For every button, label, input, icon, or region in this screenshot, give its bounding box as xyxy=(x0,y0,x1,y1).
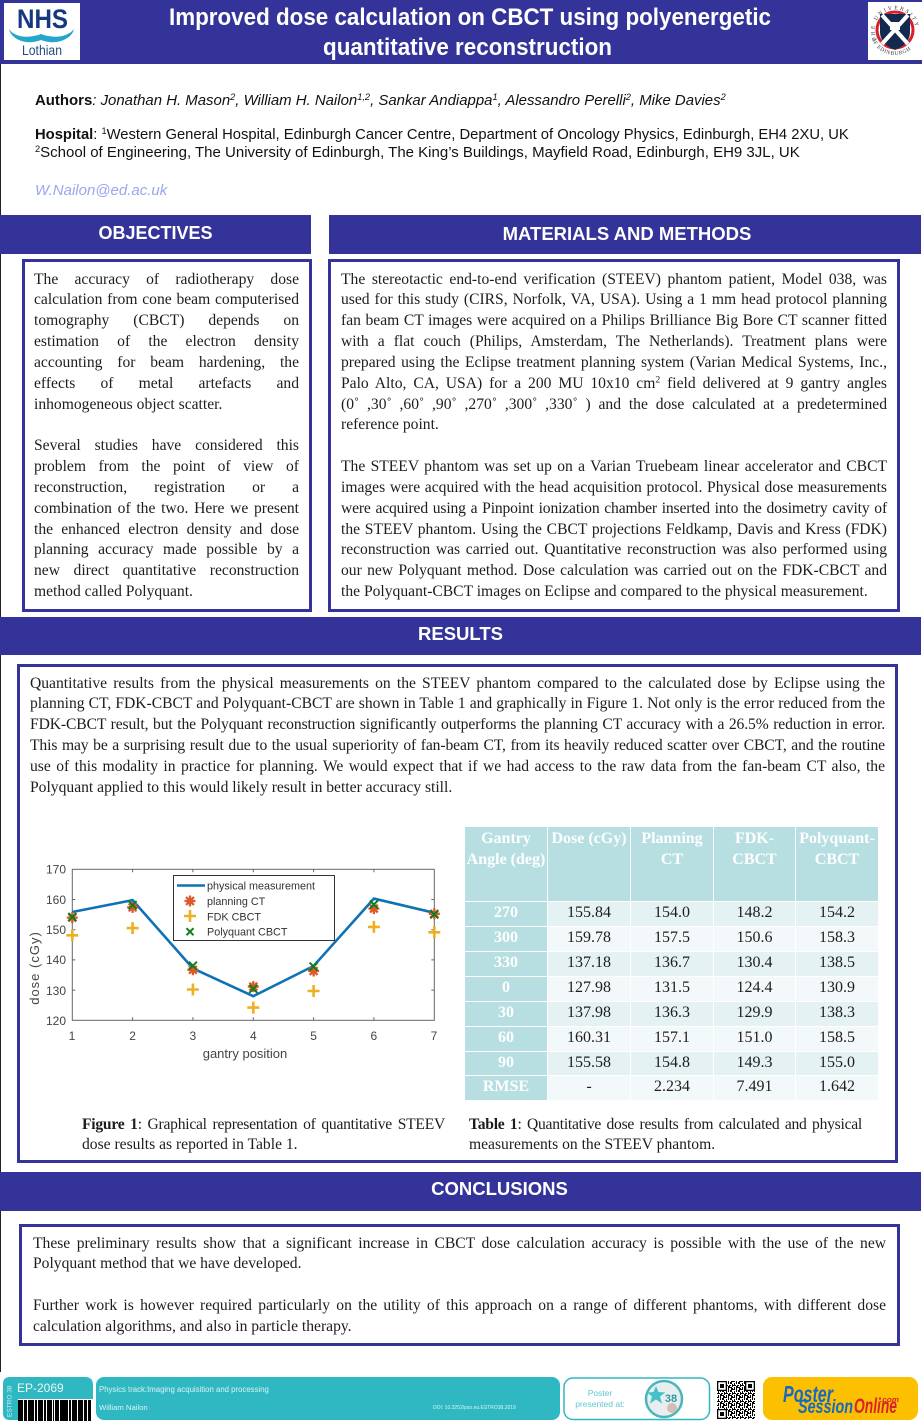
methods text: prepared using the Eclipse treatment planning system (Varian Medical Systems, Inc., xyxy=(341,354,887,371)
table: quantitative dose results: 130.4 xyxy=(736,954,772,971)
title text xyxy=(169,4,771,61)
table: quantitative dose results: 138.3 xyxy=(819,1004,855,1021)
table: quantitative dose results: 300 xyxy=(494,929,518,946)
contact email: W.Nailon@ed.ac.uk xyxy=(35,182,167,199)
table: quantitative dose results: 130.9 xyxy=(819,979,855,996)
methods text: were acquired using a Pinpoint ionization chamber inserted into the dosimetry cavity of xyxy=(341,500,887,517)
table: quantitative dose results: 137.18 xyxy=(567,954,611,971)
x axis labels: 4 xyxy=(250,1029,257,1043)
panel: objectives xyxy=(22,259,312,612)
icon: barcode xyxy=(18,1400,91,1421)
heading: conclusions xyxy=(0,1172,921,1211)
x axis labels: 5 xyxy=(310,1029,317,1043)
methods text: Palo Alto, CA, USA) for a 200 MU 10x10 cm2 field delivered at 9 gantry angles xyxy=(341,374,887,392)
table 1 caption: Table 1: Quantitative dose results from calculated and physical xyxy=(469,1116,862,1132)
panel: materials and methods xyxy=(328,259,900,612)
y axis labels: 150 xyxy=(46,923,66,937)
footer: poster id tag: ESTRO 38 xyxy=(6,1385,14,1417)
methods text: (0˚ ,30˚ ,60˚ ,90˚ ,270˚ ,300˚ ,330˚ ) and the dose calculated at a predetermined xyxy=(341,396,887,413)
conclusions text xyxy=(33,1234,886,1335)
results text: use of this modality in practice for planning. We would expect that if we had access to the raw data from the fan-beam CT also, the xyxy=(30,758,885,775)
methods text: reconstruction was carried out. Quantitative reconstruction was also performed using xyxy=(341,541,887,558)
results text: This may be a surprising result due to the usual superiority of fan-beam CT, from its heavily reduced scatter over CBCT, and the routine xyxy=(30,737,885,754)
results text: Polyquant applied to this would likely result in better accuracy still. xyxy=(30,779,452,796)
x axis labels: 2 xyxy=(129,1029,136,1043)
heading: results xyxy=(0,617,921,655)
y axis labels: 170 xyxy=(46,862,66,876)
objectives text: accounting for beam hardening, the xyxy=(34,354,299,371)
figure 1 caption: Figure 1: Graphical representation of quantitative STEEV xyxy=(82,1116,445,1132)
objectives text: reconstruction, registration or a xyxy=(34,479,299,496)
table: quantitative dose results: 136.7 xyxy=(654,954,690,971)
objectives text: calculation from cone beam computerised xyxy=(34,291,299,308)
objectives text: the enhanced electron density and dose xyxy=(34,521,299,538)
table: quantitative dose results xyxy=(465,827,878,1100)
series: Polyquant CBCT xyxy=(68,900,438,993)
authors: Authors: Jonathan H. Mason2, William H. Nailon1,2, Sankar Andiappa1, Alessandro Perelli2, Mike Davies2 xyxy=(35,92,726,109)
footer: poster presented at: presented at: xyxy=(575,1399,625,1409)
chart legend: FDK CBCT xyxy=(207,911,261,923)
objectives text: planning accuracy made possible by a xyxy=(34,541,299,558)
table: quantitative dose results: 157.1 xyxy=(654,1029,690,1046)
hospital affiliations xyxy=(35,126,849,161)
methods text: fan beam CT images were acquired on a Philips Brilliance Big Bore CT scanner fitted xyxy=(341,312,887,329)
table: quantitative dose results: 154.0 xyxy=(654,904,690,921)
heading: results: RESULTS xyxy=(418,623,503,644)
table: quantitative dose results: Polyquant-CBCT xyxy=(799,830,875,868)
table: quantitative dose results: 138.5 xyxy=(819,954,855,971)
presenter name: William Nailon xyxy=(99,1403,148,1412)
footer: poster id tag xyxy=(3,1377,93,1421)
footer: poster id tag: EP-2069 xyxy=(17,1381,64,1395)
results text xyxy=(30,674,885,796)
x axis labels: 6 xyxy=(371,1029,378,1043)
logo: NHS Lothian: Lothian xyxy=(22,42,62,58)
methods text: images were acquired with the head acquisition protocol. Physical dose measurements xyxy=(341,479,887,496)
logo: Poster Session Online: .com xyxy=(880,1395,899,1404)
x axis labels: 7 xyxy=(431,1029,438,1043)
y axis title: dose (cGy) xyxy=(27,931,42,1005)
results text: FDK-CBCT result, but the Polyquant reconstruction significantly outperforms the planning CT accuracy with a 26.5% reduction in error. xyxy=(30,716,885,733)
objectives text: estimation of the electron density xyxy=(34,333,299,350)
objectives text: inhomogeneous object scatter. xyxy=(34,396,222,413)
table: quantitative dose results: 148.2 xyxy=(736,904,772,921)
table: quantitative dose results: - xyxy=(586,1078,592,1095)
conclusions text: calculation algorithms, and also in particle therapy. xyxy=(33,1318,352,1335)
objectives text: Several studies have considered this xyxy=(34,437,299,454)
chart legend: physical measurement xyxy=(207,881,315,893)
objectives text: problem from the point of view of xyxy=(34,458,299,475)
icon: ESTRO 38 badge: 38 xyxy=(665,1393,677,1405)
methods text: used for this study (CIRS, Norfolk, VA, USA). Using a 1 mm head protocol planning xyxy=(341,291,887,308)
x axis title: gantry position xyxy=(203,1046,287,1061)
table: quantitative dose results: 330 xyxy=(494,954,518,971)
title text: quantitative reconstruction xyxy=(323,34,612,61)
series: FDK CBCT xyxy=(66,921,440,1014)
objectives text xyxy=(34,270,299,600)
table: quantitative dose results: 60 xyxy=(498,1029,514,1046)
logo: Poster Session Online: Poster xyxy=(783,1381,834,1407)
series: planning CT xyxy=(67,902,440,992)
logo: NHS Lothian xyxy=(4,3,80,60)
table: quantitative dose results: 90 xyxy=(498,1054,514,1070)
table: quantitative dose results: 157.5 xyxy=(654,929,690,946)
heading: objectives: OBJECTIVES xyxy=(98,223,213,243)
table: quantitative dose results: 0 xyxy=(502,979,510,996)
objectives text: The accuracy of radiotherapy dose xyxy=(34,270,299,288)
hospital affiliations: 2School of Engineering, The University of Edinburgh, The King’s Buildings, Mayfield Road, Edinburgh, EH9 3JL, UK xyxy=(35,144,800,161)
logo: Poster Session Online xyxy=(763,1377,918,1420)
table: quantitative dose results: 1.642 xyxy=(819,1078,855,1095)
heading: materials and methods: MATERIALS AND METHODS xyxy=(503,223,751,244)
x axis labels: 3 xyxy=(190,1029,197,1043)
footer: poster presented at xyxy=(563,1377,710,1420)
objectives text: new direct quantitative reconstruction xyxy=(34,562,299,579)
y axis labels: 120 xyxy=(46,1014,66,1028)
conclusions text: These preliminary results show that a significant increase in CBCT dose calculation accuracy is possible with the use of the new xyxy=(33,1234,886,1252)
table: quantitative dose results: 159.78 xyxy=(567,929,611,946)
y axis labels xyxy=(46,862,66,1028)
objectives text: tomography (CBCT) depends on xyxy=(34,312,299,329)
table: quantitative dose results: Dose (cGy) xyxy=(551,830,627,847)
logo: University of Edinburgh crest: THE UNIVERSITY xyxy=(870,6,919,42)
series: physical measurement xyxy=(72,899,434,996)
heading: objectives xyxy=(0,215,311,254)
line chart: dose by gantry position xyxy=(27,862,440,1061)
logo: Poster Session Online: Online xyxy=(854,1395,897,1418)
table 1 caption xyxy=(469,1116,862,1153)
table: quantitative dose results: 2.234 xyxy=(654,1078,690,1095)
table: quantitative dose results: 150.6 xyxy=(736,929,772,946)
table: quantitative dose results: RMSE xyxy=(483,1078,529,1095)
chart legend xyxy=(174,876,334,940)
table: quantitative dose results: Gantry Angle (deg) xyxy=(467,830,545,868)
conclusions text: Further work is however required particularly on the utility of this approach on a range of different phantoms, with different dose xyxy=(33,1297,886,1314)
figure 1 caption xyxy=(82,1116,446,1153)
logo: University of Edinburgh crest: OF EDINBURGH xyxy=(872,38,911,55)
table: quantitative dose results: 155.84 xyxy=(567,904,611,921)
methods text: the STEEV phantom. Using the CBCT projections Feldkamp, Davis and Kress (FDK) xyxy=(341,521,887,538)
methods text: with a flat couch (Philips, Amsterdam, The Netherlands). Treatment plans were xyxy=(341,333,887,350)
title text: Improved dose calculation on CBCT using polyenergetic xyxy=(169,4,771,31)
table: quantitative dose results: 160.31 xyxy=(567,1029,611,1046)
track name: Physics track:Imaging acquisition and processing xyxy=(99,1384,269,1394)
table: quantitative dose results: 154.8 xyxy=(654,1054,690,1070)
table: quantitative dose results: 154.2 xyxy=(819,904,855,921)
panel: conclusions xyxy=(19,1224,900,1346)
doi: DOI: 10.3252/pso.eu.ESTRO38.2019 xyxy=(433,1405,516,1411)
table: quantitative dose results: 270 xyxy=(494,904,518,921)
table: quantitative dose results: CBCT xyxy=(732,850,777,868)
methods text: the Polyquant-CBCT images on Eclipse and compared to the physical measurement. xyxy=(341,583,868,600)
table: quantitative dose results: 149.3 xyxy=(736,1054,772,1070)
conclusions text: Polyquant method that we have developed. xyxy=(33,1255,302,1272)
objectives text: effects of metal artefacts and xyxy=(34,375,299,392)
table: quantitative dose results: 137.98 xyxy=(567,1004,611,1021)
footer: poster presented at: Poster xyxy=(588,1388,612,1398)
hospital affiliations: Hospital: 1Western General Hospital, Edinburgh Cancer Centre, Department of Oncology Physics, Edinburgh, EH4 2XU, UK xyxy=(35,126,849,143)
icon: ESTRO 38 badge xyxy=(646,1381,682,1417)
table: quantitative dose results: 158.5 xyxy=(819,1029,855,1046)
table: quantitative dose results: 151.0 xyxy=(736,1029,772,1046)
x axis labels: 1 xyxy=(69,1029,76,1043)
objectives text: method called Polyquant. xyxy=(34,583,193,600)
methods text: our new Polyquant method. Dose calculation was carried out on the FDK-CBCT and xyxy=(341,562,887,579)
table: quantitative dose results: FDK- xyxy=(735,830,774,847)
title banner xyxy=(0,0,922,64)
table: quantitative dose results: 131.5 xyxy=(654,979,690,996)
table: quantitative dose results: 129.9 xyxy=(736,1004,772,1021)
results text: planning CT, FDK-CBCT and Polyquant-CBCT are shown in Table 1 and graphically in Figure 1. Not only is the error reduced from the xyxy=(30,695,885,712)
table: quantitative dose results: 155.0 xyxy=(819,1054,855,1070)
panel: results xyxy=(17,664,898,1163)
methods text: The STEEV phantom was set up on a Varian Truebeam linear accelerator and CBCT xyxy=(341,458,887,475)
figure 1 caption: dose results as reported in Table 1. xyxy=(82,1136,298,1153)
y axis labels: 130 xyxy=(46,984,66,998)
logo: NHS Lothian: NHS xyxy=(17,4,68,34)
heading: materials and methods xyxy=(329,215,921,254)
table 1 caption: measurements on the STEEV phantom. xyxy=(469,1136,715,1153)
y axis labels: 140 xyxy=(46,953,66,967)
methods text xyxy=(341,270,888,600)
table: quantitative dose results: 158.3 xyxy=(819,929,855,946)
left page edge xyxy=(0,64,1,1372)
methods text: reference point. xyxy=(341,416,439,433)
table: quantitative dose results: 30 xyxy=(498,1004,514,1021)
objectives text: combination of the two. Here we present xyxy=(34,500,299,517)
table: quantitative dose results: 127.98 xyxy=(567,979,611,996)
y axis labels: 160 xyxy=(46,893,66,907)
x axis labels xyxy=(69,1029,438,1043)
methods text: The stereotactic end-to-end verification (STEEV) phantom patient, Model 038, was xyxy=(341,270,887,288)
footer: track and presenter bar xyxy=(96,1377,560,1420)
results text: Quantitative results from the physical measurements on the STEEV phantom compared to the calculated dose by Eclipse using the xyxy=(30,674,885,692)
table: quantitative dose results: 136.3 xyxy=(654,1004,690,1021)
table: quantitative dose results: 155.58 xyxy=(567,1054,611,1070)
chart legend: planning CT xyxy=(207,896,266,908)
heading: conclusions: CONCLUSIONS xyxy=(431,1178,568,1199)
table: quantitative dose results: Planning CT xyxy=(641,830,703,868)
icon: QR code xyxy=(717,1381,755,1419)
chart legend: Polyquant CBCT xyxy=(207,927,288,939)
logo: Poster Session Online: Session xyxy=(798,1397,853,1418)
logo: University of Edinburgh crest xyxy=(868,2,922,60)
table: quantitative dose results: 124.4 xyxy=(736,979,772,996)
table: quantitative dose results: 7.491 xyxy=(736,1078,772,1095)
